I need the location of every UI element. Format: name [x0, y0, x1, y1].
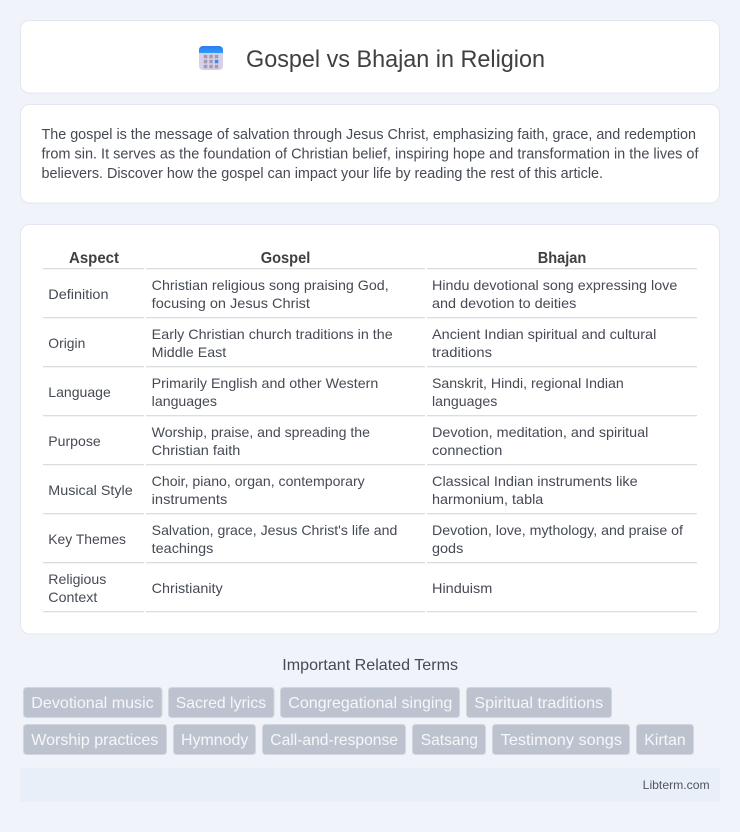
icon: calendar — [199, 46, 223, 70]
row: Language: Primarily English and other Western — [152, 375, 378, 391]
row: Origin: Origin — [48, 335, 85, 351]
tag: Call-and-response: Call-and-response — [270, 732, 398, 749]
tag: Satsang: Satsang — [421, 732, 478, 749]
table header row: Aspect — [69, 250, 120, 267]
related term tags — [24, 688, 694, 754]
row: Key Themes: Devotion, love, mythology, and praise of — [432, 522, 683, 538]
row: Purpose — [43, 424, 697, 465]
tag: Devotional music — [24, 688, 162, 718]
row: Definition: Definition — [48, 286, 108, 302]
tag: Hymnody — [174, 724, 256, 754]
panel: header — [20, 20, 720, 93]
intro paragraph: from sin. It serves as the foundation of Christian belief, inspiring hope and transformation in the lives of — [42, 146, 699, 162]
row: Origin: Middle East — [152, 344, 226, 360]
tag: Congregational singing: Congregational singing — [288, 695, 452, 712]
tag: Worship practices: Worship practices — [31, 732, 158, 749]
row: Musical Style — [43, 473, 697, 514]
panel: introduction — [20, 104, 720, 203]
tag: Congregational singing — [280, 688, 460, 718]
row: Religious Context: Christianity — [152, 580, 223, 596]
row: Purpose: Devotion, meditation, and spiritual — [432, 424, 648, 440]
intro paragraph: The gospel is the message of salvation through Jesus Christ, emphasizing faith, grace, and redemption — [42, 127, 696, 143]
row: Religious Context: Hinduism — [432, 580, 492, 596]
tag: Worship practices — [24, 724, 166, 754]
intro paragraph — [42, 127, 699, 182]
row: Purpose: connection — [432, 442, 502, 458]
row: Origin: traditions — [432, 344, 492, 360]
row: Origin: Early Christian church traditions in the — [152, 326, 393, 342]
row: Key Themes — [43, 522, 697, 563]
row: Language — [43, 375, 697, 416]
row: Musical Style: harmonium, tabla — [432, 491, 544, 507]
tag: Spiritual traditions — [466, 688, 612, 718]
row: Religious Context: Context — [48, 589, 97, 605]
row: Key Themes: teachings — [152, 540, 213, 556]
row: Origin: Ancient Indian spiritual and cultural — [432, 326, 656, 342]
tag: Kirtan: Kirtan — [644, 732, 686, 749]
row: Language: languages — [432, 393, 497, 409]
table header row: Bhajan — [538, 250, 586, 267]
row: Language: languages — [152, 393, 217, 409]
row: Key Themes: Key Themes — [48, 531, 126, 547]
tag: Hymnody: Hymnody — [181, 732, 248, 749]
tag: Satsang — [412, 724, 486, 754]
row: Definition: focusing on Jesus Christ — [152, 295, 310, 311]
intro paragraph: believers. Discover how the gospel can impact your life by reading the rest of this article. — [42, 166, 603, 182]
row: Definition: Christian religious song praising God, — [152, 277, 389, 293]
row: Religious Context — [43, 571, 697, 612]
tag: Testimony songs: Testimony songs — [501, 732, 622, 749]
table header row — [43, 250, 697, 269]
row: Musical Style: Musical Style — [48, 482, 133, 498]
tag: Kirtan — [636, 724, 694, 754]
row: Musical Style: Classical Indian instruments like — [432, 473, 638, 489]
tag: Spiritual traditions: Spiritual traditions — [474, 695, 603, 712]
row: Purpose: Worship, praise, and spreading the — [152, 424, 370, 440]
footer credit: Libterm.com — [643, 778, 710, 792]
tag: Testimony songs — [492, 724, 630, 754]
table header row: Gospel — [261, 250, 310, 267]
row: Definition: and devotion to deities — [432, 295, 576, 311]
row: Musical Style: instruments — [152, 491, 227, 507]
heading: related terms: Important Related Terms — [282, 657, 458, 674]
row: Definition — [43, 277, 697, 318]
row: Key Themes: Salvation, grace, Jesus Christ's life and — [152, 522, 397, 538]
row: Purpose: Purpose — [48, 433, 101, 449]
row: Key Themes: gods — [432, 540, 463, 556]
tag: Sacred lyrics — [168, 688, 274, 718]
row: Definition: Hindu devotional song expressing love — [432, 277, 678, 293]
row: Musical Style: Choir, piano, organ, contemporary — [152, 473, 365, 489]
tag: Devotional music: Devotional music — [31, 695, 154, 712]
title: Gospel vs Bhajan in Religion — [246, 46, 545, 73]
tag: Sacred lyrics: Sacred lyrics — [176, 695, 266, 712]
row: Purpose: Christian faith — [152, 442, 240, 458]
row: Religious Context: Religious — [48, 571, 106, 587]
tag: Call-and-response — [262, 724, 406, 754]
footer bar — [20, 768, 720, 802]
panel: comparison table — [20, 224, 720, 634]
row: Origin — [43, 326, 697, 367]
row: Language: Sanskrit, Hindi, regional Indian — [432, 375, 624, 391]
row: Language: Language — [48, 384, 111, 400]
